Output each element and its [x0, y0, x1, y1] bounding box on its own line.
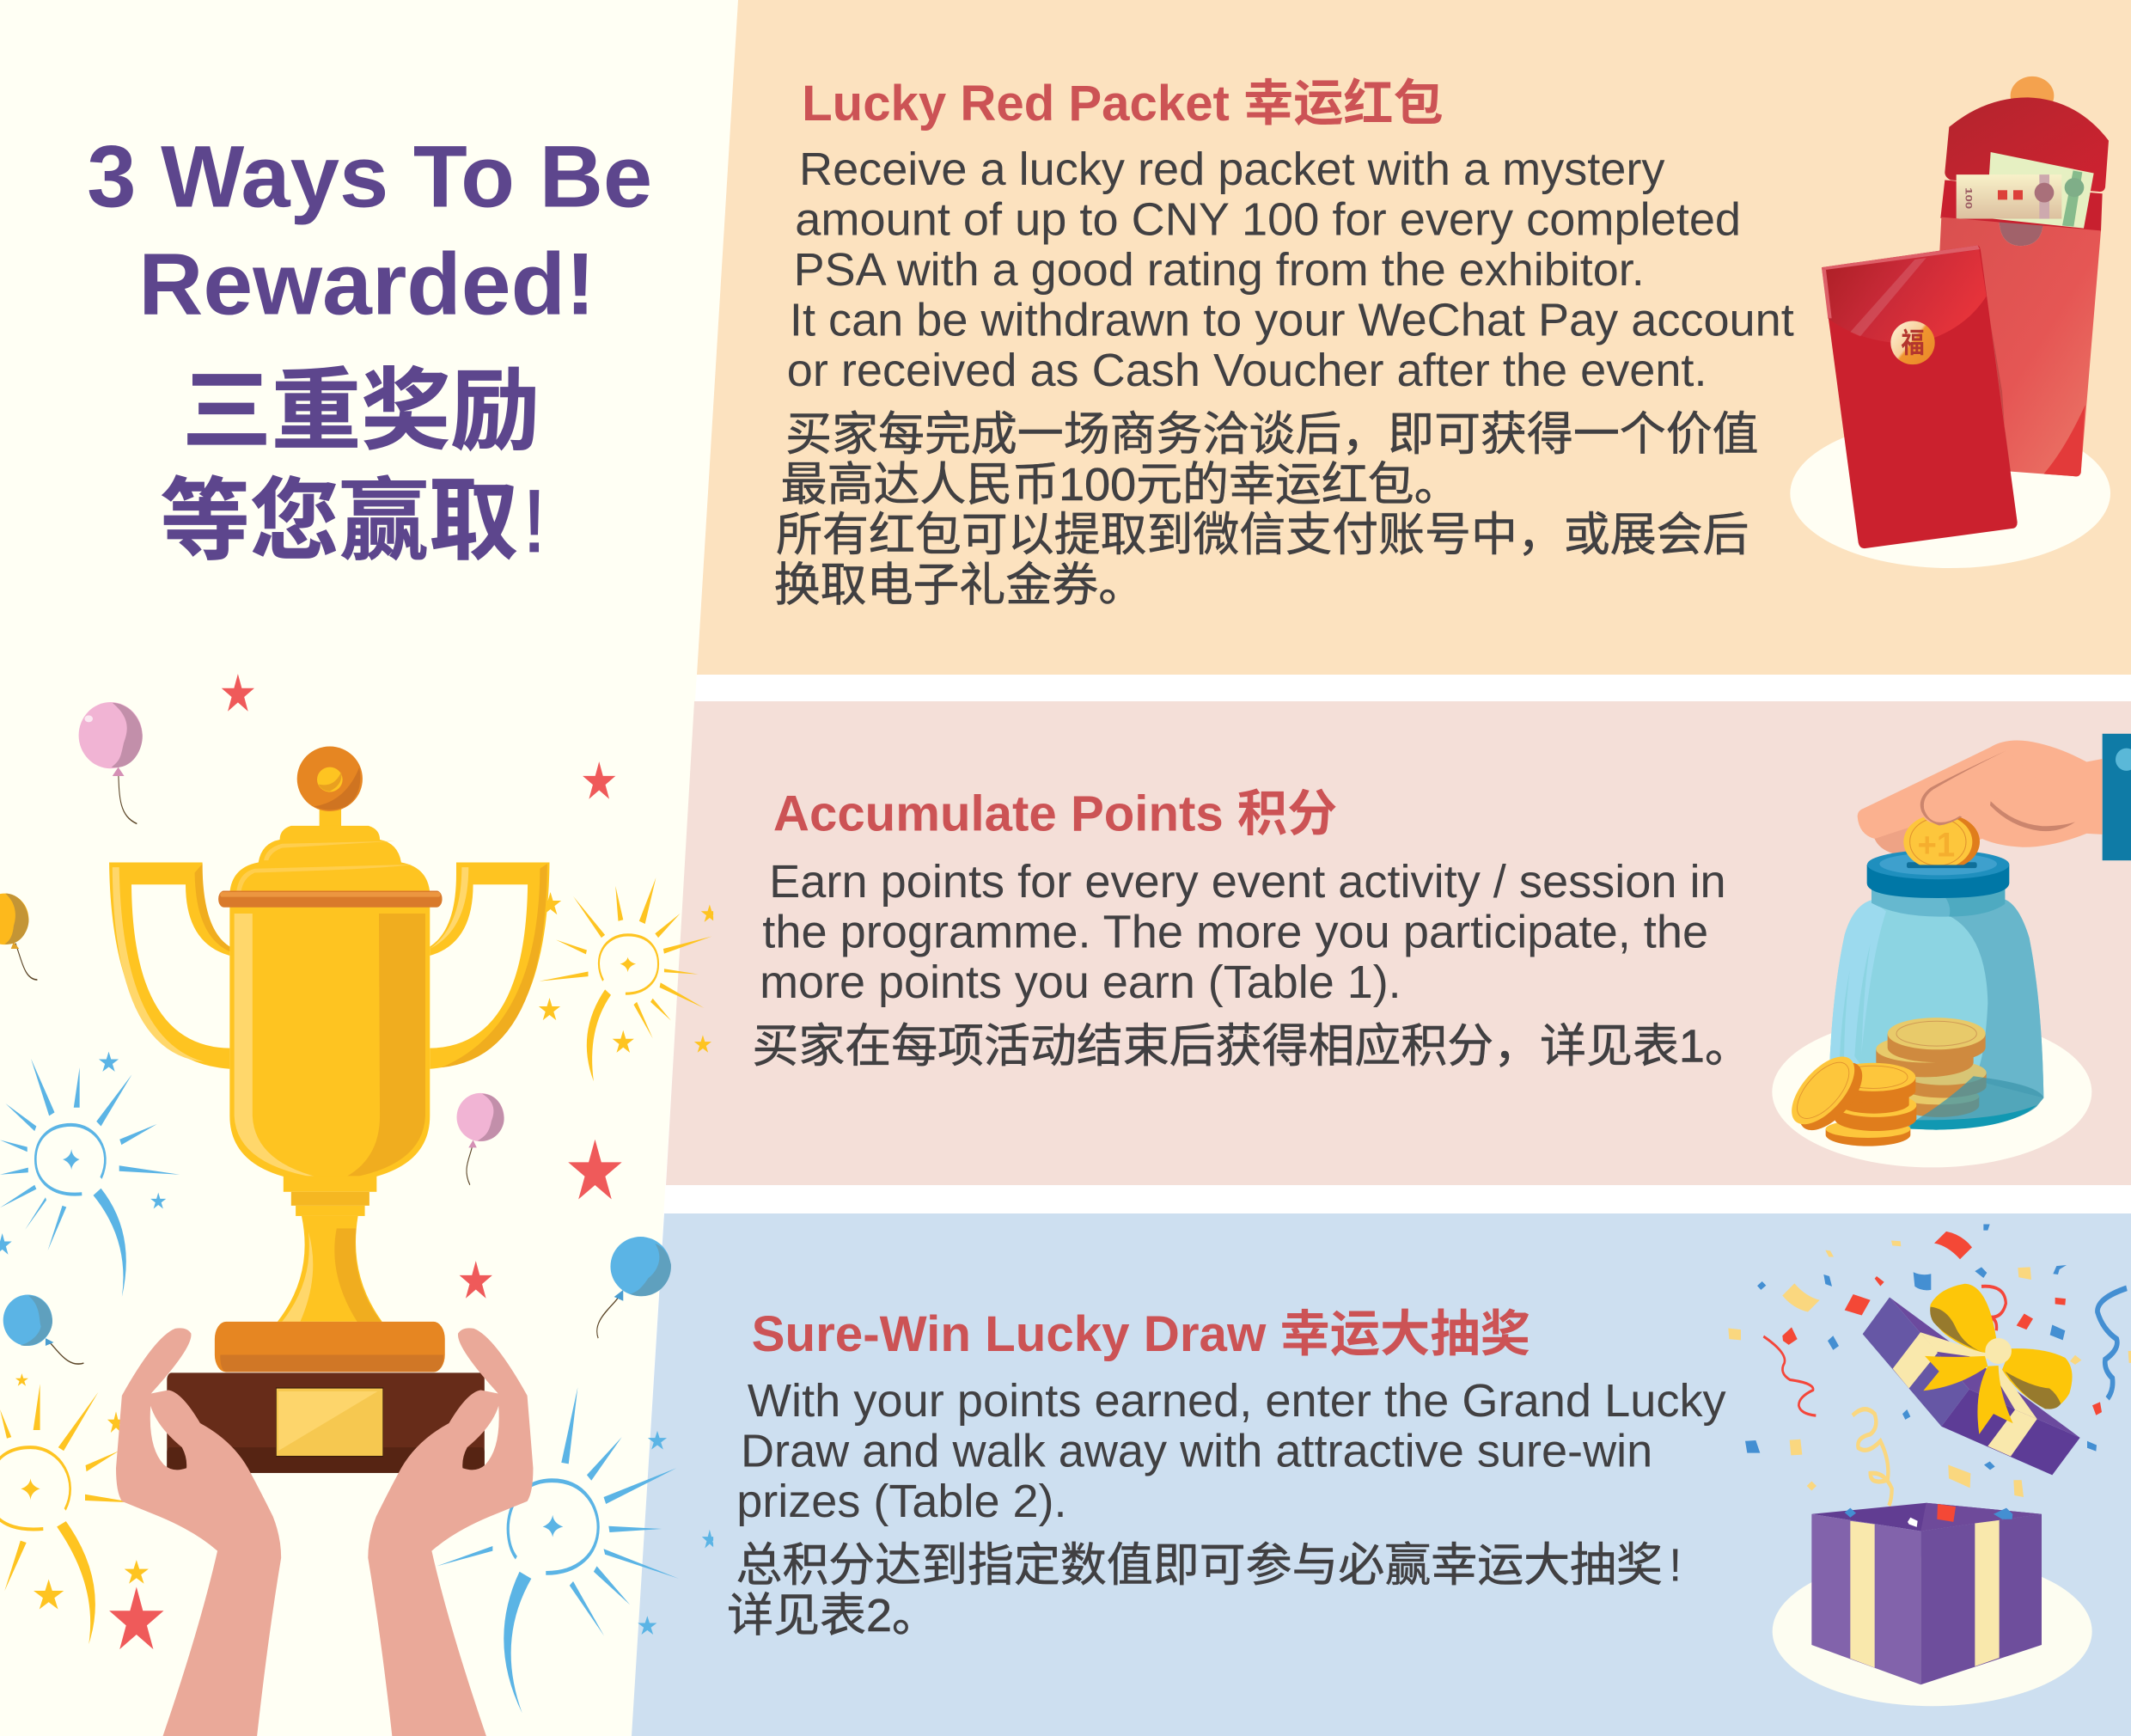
english body: or received as Cash Voucher after the event.: [787, 345, 1707, 396]
english body: Earn points for every event activity / session in: [769, 856, 1726, 908]
panel: accumulate points background: [666, 701, 2131, 1185]
balloon: blue right: [597, 1237, 671, 1338]
palm shadow: [1875, 822, 1925, 859]
illustration: red packets: [1790, 76, 2110, 568]
coin stack in front: [1780, 1046, 1916, 1146]
title chinese line 2: !: [522, 472, 546, 572]
fireworks: blue bottom right: [437, 1387, 679, 1714]
back envelope: [1939, 76, 2109, 476]
chinese body: !: [1669, 1539, 1682, 1591]
jar lid: [1867, 850, 2009, 898]
english body: [736, 1375, 1726, 1527]
english body: PSA with a good rating from the exhibitor.: [794, 244, 1645, 296]
hand palm: [1858, 741, 2103, 853]
fireworks: yellow bottom left: [0, 1384, 134, 1644]
platform ellipse: [1790, 419, 2110, 568]
english body: more points you earn (Table 1).: [760, 957, 1401, 1008]
section text: sure-win lucky draw: [727, 1306, 1726, 1641]
chinese body: 所有红包可以提取到微信支付账号中，或展会后: [776, 510, 1749, 561]
english body: Draw and walk away with attractive sure-win: [741, 1426, 1652, 1477]
english body: prizes (Table 2).: [736, 1476, 1067, 1527]
english body: amount of up to CNY 100 for every completed: [795, 194, 1741, 246]
confetti yellow: [1728, 1240, 2131, 1497]
title english line 2: Rewarded!: [138, 235, 595, 333]
hand left: [116, 1328, 281, 1736]
trophy stem: [278, 1176, 382, 1322]
trophy handle left: [109, 862, 229, 1069]
section text: accumulate points: [752, 785, 1751, 1072]
trophy cup: [229, 905, 430, 1183]
coin going in: [1903, 816, 1980, 865]
confetti blue: [1745, 1225, 2097, 1470]
gift lid: [1863, 1298, 2080, 1475]
jar shadow base: [1853, 1076, 2043, 1130]
left ivory panel: [0, 0, 738, 1736]
chinese body: 买家在每项活动结束后获得相应积分，详见表1。: [752, 1020, 1751, 1072]
back envelope: 100: [1963, 187, 1974, 209]
stars: blue: [0, 1052, 717, 1635]
heading: sure-win lucky draw: Sure-Win Lucky Draw 幸运大抽奖: [752, 1306, 1530, 1362]
english body: It can be withdrawn to your WeChat Pay account: [790, 295, 1794, 346]
hand right: [368, 1328, 533, 1736]
english body: With your points earned, enter the Grand Lucky: [748, 1375, 1726, 1427]
section text: lucky red packet: [774, 76, 1794, 611]
chinese body: [727, 1539, 1682, 1641]
heading: accumulate points: Accumulate Points 积分: [773, 785, 1337, 841]
balloon: blue left: [3, 1295, 83, 1364]
english body: the programme. The more you participate, the: [762, 906, 1708, 957]
english body: [787, 144, 1794, 396]
stars: yellow: [15, 892, 718, 1610]
coin going in: +1: [1917, 827, 1955, 865]
streamers: [1763, 1287, 2127, 1506]
fireworks: blue left: [0, 1059, 180, 1297]
panel: sure-win lucky draw background: [632, 1213, 2131, 1736]
illustration: trophy held by hands with fireworks: [0, 674, 718, 1736]
english body: [760, 856, 1726, 1008]
platform ellipse: [1773, 1556, 2092, 1706]
title: [87, 127, 652, 572]
trophy lid: [218, 746, 443, 908]
title english line 1: 3 Ways To Be: [87, 127, 652, 225]
chinese body: 最高达人民币100元的幸运红包。: [781, 459, 1461, 510]
stars: red: [109, 674, 622, 1649]
trophy handle right: [430, 862, 550, 1069]
jar: [1829, 888, 2043, 1130]
platform ellipse: [1772, 1017, 2091, 1167]
illustration: open gift box with confetti: [1728, 1225, 2131, 1706]
illustration: coin jar and hand: [1772, 734, 2131, 1167]
heading: lucky red packet: Lucky Red Packet 幸运红包: [802, 76, 1444, 131]
chinese body: 详见表2。: [727, 1590, 938, 1641]
panel: lucky red packet background: [697, 0, 2131, 675]
english body: Receive a lucky red packet with a mystery: [799, 144, 1665, 195]
balloon: pink top left: [79, 702, 143, 823]
chinese body: 总积分达到指定数值即可参与必赢幸运大抽奖: [736, 1539, 1663, 1591]
seal with fu character: [1890, 320, 1935, 364]
fingers: [1920, 750, 2075, 831]
gift box: [1811, 1503, 2042, 1684]
chinese body: 买家每完成一场商务洽谈后，即可获得一个价值: [785, 409, 1759, 461]
title chinese line 2: 等您赢取: [161, 472, 518, 572]
title chinese line 1: 三重奖励: [182, 362, 540, 462]
balloon: pink small right: [457, 1093, 504, 1185]
chinese body: 换取电子礼金券。: [774, 559, 1145, 611]
seal with fu character: 福: [1901, 320, 1925, 361]
bow: [1923, 1284, 2073, 1434]
sleeve: [2103, 734, 2131, 860]
trophy base: [167, 1322, 485, 1473]
fireworks: yellow top right: [539, 877, 712, 1081]
front envelope: [1822, 245, 2018, 548]
chinese body: [774, 409, 1759, 611]
balloon: orange left edge: [0, 894, 37, 980]
coins in jar: [1876, 1018, 1987, 1117]
confetti red: [1782, 1232, 2102, 1415]
